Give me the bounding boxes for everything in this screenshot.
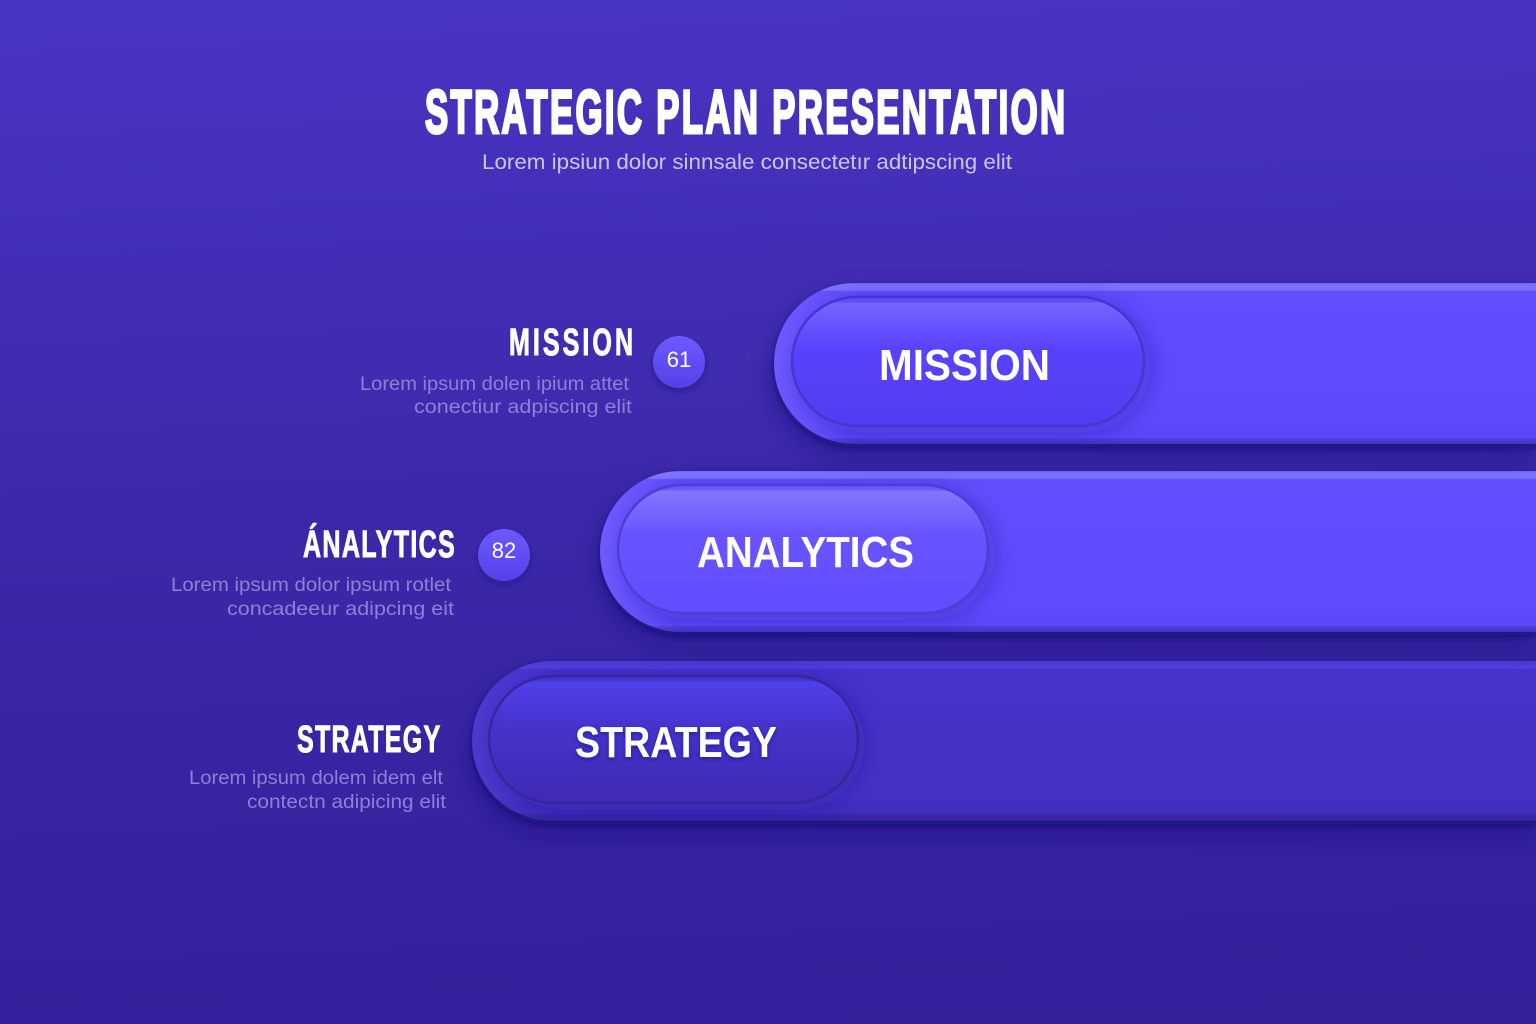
badge: 82 xyxy=(478,529,530,581)
mission description: Lorem ipsum dolen ipium attet xyxy=(360,374,630,395)
panel: strategy bar xyxy=(472,661,1536,821)
mission description: conectiur adpiscing elit xyxy=(414,397,633,418)
badge: 61: 61 xyxy=(667,347,691,372)
subtitle: Lorem ipsiun dolor sinnsale consectetır adtipscing elit xyxy=(482,151,1012,174)
text block: strategy xyxy=(189,718,447,813)
strategy description: Lorem ipsum dolem idem elt xyxy=(189,768,444,789)
mission pill xyxy=(792,297,1144,426)
strategy pill xyxy=(489,676,858,803)
analytics description xyxy=(171,575,455,620)
title: STRATEGIC PLAN PRESENTATION xyxy=(425,78,1065,147)
mission pill label: MISSION xyxy=(879,341,1050,390)
strategy description: contectn adipicing elit xyxy=(247,792,447,813)
strategy pill label: STRATEGY xyxy=(575,718,777,767)
mission heading: MISSION xyxy=(509,321,633,363)
mission description xyxy=(360,374,633,418)
analytics heading: ÁNALYTICS xyxy=(303,523,455,565)
analytics description: concadeeur adipcing eit xyxy=(227,599,455,620)
badge: 61 xyxy=(653,336,705,388)
strategy heading: STRATEGY xyxy=(297,718,440,760)
panel: mission bar xyxy=(774,283,1536,444)
panel: analytics bar xyxy=(600,471,1536,632)
analytics pill xyxy=(618,485,988,613)
analytics pill label: ANALYTICS xyxy=(697,528,914,577)
badge: 82: 82 xyxy=(492,538,516,563)
title block xyxy=(425,78,1065,174)
text block: mission xyxy=(360,321,633,418)
text block: analytics xyxy=(171,523,455,620)
analytics description: Lorem ipsum dolor ipsum rotlet xyxy=(171,575,452,596)
strategy description xyxy=(189,768,447,813)
